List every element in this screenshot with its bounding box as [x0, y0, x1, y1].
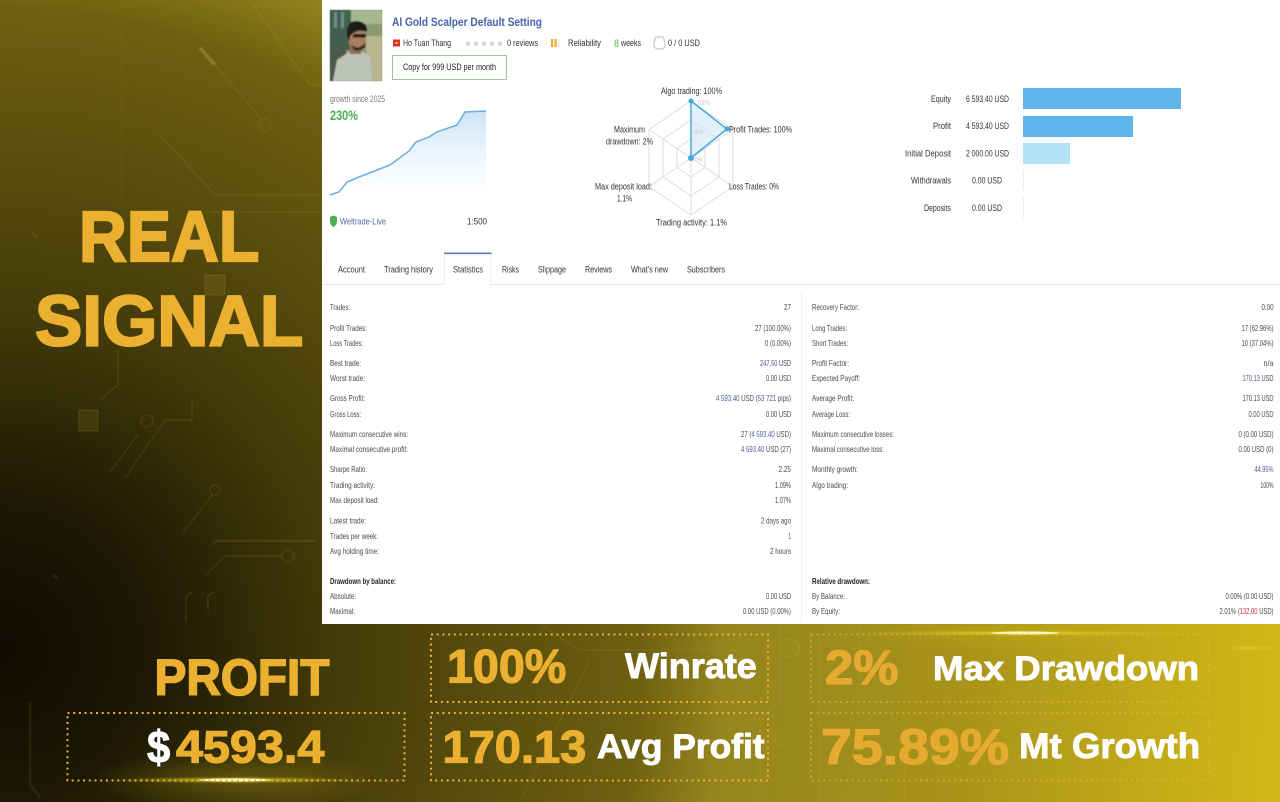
statistics table: left column: 1.09% — [775, 480, 791, 490]
statistics table: right column: Recovery Factor: — [812, 302, 859, 312]
radar chart: Max deposit load: — [595, 182, 652, 192]
statistics table: right column: Maximal consecutive loss: — [812, 444, 884, 454]
statistics table: left column: 4 593.40 USD (53 721 pips) — [716, 393, 791, 403]
statistics table: left column: Worst trade: — [330, 373, 365, 383]
statistics table: left column: Trading activity: — [330, 480, 375, 490]
statistics table: right column: Relative drawdown: — [812, 576, 870, 586]
account bar chart: Equity — [931, 94, 951, 104]
glow: bottom left streak — [85, 750, 385, 802]
author and meta row: Reliability — [568, 38, 601, 48]
stat: profit: $ — [147, 723, 170, 773]
radar chart: Maximum — [614, 124, 645, 134]
author and meta row: Ho Tuan Thang — [403, 38, 451, 48]
author and meta row — [393, 37, 700, 50]
statistics table: left column: 0.00 USD — [766, 591, 791, 601]
account bar chart — [905, 88, 1181, 218]
tab bar: Reviews — [585, 264, 612, 274]
statistics table: right column: By Equity: — [812, 606, 840, 616]
signal title: AI Gold Scalper Default Setting — [392, 15, 542, 29]
stat: average profit: Avg Profit — [597, 729, 765, 766]
statistics table: right column: Profit Factor: — [812, 358, 849, 368]
statistics table: left column: Latest trade: — [330, 516, 366, 526]
copy button: Copy for 999 USD per month — [403, 62, 496, 72]
statistics table: right column: Maximum consecutive losses: — [812, 429, 894, 439]
stat: average profit: 170.13 — [442, 721, 586, 772]
statistics table: left column: Maximum consecutive wins: — [330, 429, 408, 439]
statistics table: left column: 27 (4 593.40 USD) — [741, 429, 791, 439]
heading: real signal: REAL — [79, 197, 259, 277]
tab bar: What's new — [631, 264, 668, 274]
heading: real signal — [35, 197, 303, 362]
statistics table: left column: 0 (0.00%) — [765, 338, 791, 348]
statistics table: left column: Profit Trades: — [330, 323, 367, 333]
account bar chart: 2 000.00 USD — [966, 148, 1009, 158]
statistics table: left column: 0.00 USD — [766, 409, 791, 419]
radar chart — [595, 86, 792, 228]
radar chart: Loss Trades: 0% — [729, 182, 779, 192]
account bar chart: 6 593.40 USD — [966, 94, 1009, 104]
trader photo — [330, 10, 382, 81]
stat: winrate — [431, 634, 768, 702]
statistics table: right column — [812, 302, 1274, 616]
stat: monthly growth: Mt Growth — [1019, 727, 1200, 766]
growth chart: 1:500 — [467, 216, 487, 226]
radar chart: drawdown: 2% — [606, 136, 653, 146]
growth chart — [330, 94, 487, 227]
growth chart: 230% — [330, 107, 358, 123]
glow: top right streak — [870, 630, 1258, 650]
tab bar: Slippage — [538, 264, 566, 274]
statistics table: left column: 27 — [784, 302, 791, 312]
statistics table: left column: Maximal consecutive profit: — [330, 444, 408, 454]
statistics table: right column: Short Trades: — [812, 338, 848, 348]
statistics table: left column: 1 — [788, 531, 791, 541]
statistics table: left column: Best trade: — [330, 358, 361, 368]
statistics table: left column: Maximal: — [330, 606, 355, 616]
stat: max drawdown — [811, 634, 1209, 702]
statistics table: left column: 2 days ago — [761, 516, 791, 526]
statistics table: right column: 2.01% (132.00 USD) — [1220, 606, 1274, 616]
radar chart: Profit Trades: 100% — [729, 124, 792, 134]
statistics table: right column: Average Loss: — [812, 409, 850, 419]
heading: real signal: SIGNAL — [35, 282, 303, 362]
account bar chart: Profit — [933, 121, 951, 131]
stat: monthly growth — [811, 713, 1209, 780]
author and meta row: ★★★★★ — [464, 38, 504, 48]
statistics table: left column: 0.00 USD — [766, 373, 791, 383]
statistics table: left column: 1.07% — [775, 495, 791, 505]
statistics table: left column: Max deposit load: — [330, 495, 379, 505]
statistics table: right column: n/a — [1264, 358, 1274, 368]
statistics table: left column: Sharpe Ratio: — [330, 464, 367, 474]
author and meta row: weeks — [620, 38, 641, 48]
tab bar: Account — [338, 264, 365, 274]
copy button — [392, 56, 506, 80]
statistics table: left column: Trades per week: — [330, 531, 378, 541]
radar chart: Trading activity: 1.1% — [656, 218, 727, 228]
statistics table: left column: Loss Trades: — [330, 338, 363, 348]
statistics table: right column: Algo trading: — [812, 480, 848, 490]
author and meta row: 0 / 0 USD — [668, 38, 700, 48]
statistics table: left column: 0.00 USD (0.00%) — [743, 606, 791, 616]
statistics table: right column: 170.13 USD — [1242, 373, 1274, 383]
tab bar: Risks — [502, 264, 519, 274]
radar chart: 100% — [697, 100, 710, 107]
account bar chart: Withdrawals — [911, 176, 951, 186]
stat: profit: 4593.4 — [176, 722, 324, 772]
author and meta row: 8 — [614, 38, 619, 50]
statistics table: left column — [330, 302, 791, 616]
statistics table: left column: 247.50 USD — [760, 358, 791, 368]
statistics table: left column: Gross Profit: — [330, 393, 365, 403]
statistics table: left column: Absolute: — [330, 591, 356, 601]
stat: max drawdown: Max Drawdown — [933, 650, 1199, 688]
radar chart: Algo trading: 100% — [661, 86, 722, 96]
statistics table: left column: 2 hours — [770, 546, 791, 556]
growth chart: growth since 2025 — [330, 94, 385, 104]
radar chart: 0% — [695, 157, 702, 164]
statistics table: left column: 2.25 — [778, 464, 791, 474]
statistics table: left column: Avg holding time: — [330, 546, 379, 556]
stat: profit — [68, 650, 404, 780]
statistics table: right column: Long Trades: — [812, 323, 847, 333]
statistics table: left column: 4 593.40 USD (27) — [741, 444, 791, 454]
account bar chart: Initial Deposit — [905, 148, 951, 158]
statistics table: right column: Expected Payoff: — [812, 373, 860, 383]
stat: monthly growth: 75.89% — [821, 720, 1009, 775]
radar chart: 1.1% — [617, 194, 632, 204]
statistics table: left column: Gross Loss: — [330, 409, 361, 419]
account bar chart: Deposits — [924, 203, 951, 213]
growth chart: Weltrade-Live — [340, 216, 386, 226]
author and meta row: 0 reviews — [507, 38, 538, 48]
tab bar: Trading history — [384, 264, 433, 274]
statistics table: left column: Trades: — [330, 302, 350, 312]
statistics table: left column: Drawdown by balance: — [330, 576, 396, 586]
stat: winrate: 100% — [447, 640, 566, 693]
tab bar: Subscribers — [687, 264, 725, 274]
statistics table: right column: By Balance: — [812, 591, 845, 601]
account bar chart: 4 593.40 USD — [966, 121, 1009, 131]
radar chart: 50% — [693, 129, 703, 136]
stat: winrate: Winrate — [625, 646, 757, 686]
statistics table: right column: Monthly growth: — [812, 464, 858, 474]
statistics table: left column: 27 (100.00%) — [755, 323, 791, 333]
tab bar — [322, 252, 1280, 285]
signal header — [330, 10, 700, 81]
account bar chart: 0.00 USD — [972, 203, 1002, 213]
panel: signal dashboard screenshot — [322, 0, 1280, 624]
stat: max drawdown: 2% — [825, 641, 899, 695]
account bar chart: 0.00 USD — [972, 176, 1002, 186]
tab bar: Statistics — [453, 264, 483, 274]
statistics table: right column: Average Profit: — [812, 393, 854, 403]
stat: profit: PROFIT — [154, 650, 329, 706]
statistics table: right column: 0.00 — [1262, 302, 1274, 312]
stat: average profit — [431, 713, 768, 780]
